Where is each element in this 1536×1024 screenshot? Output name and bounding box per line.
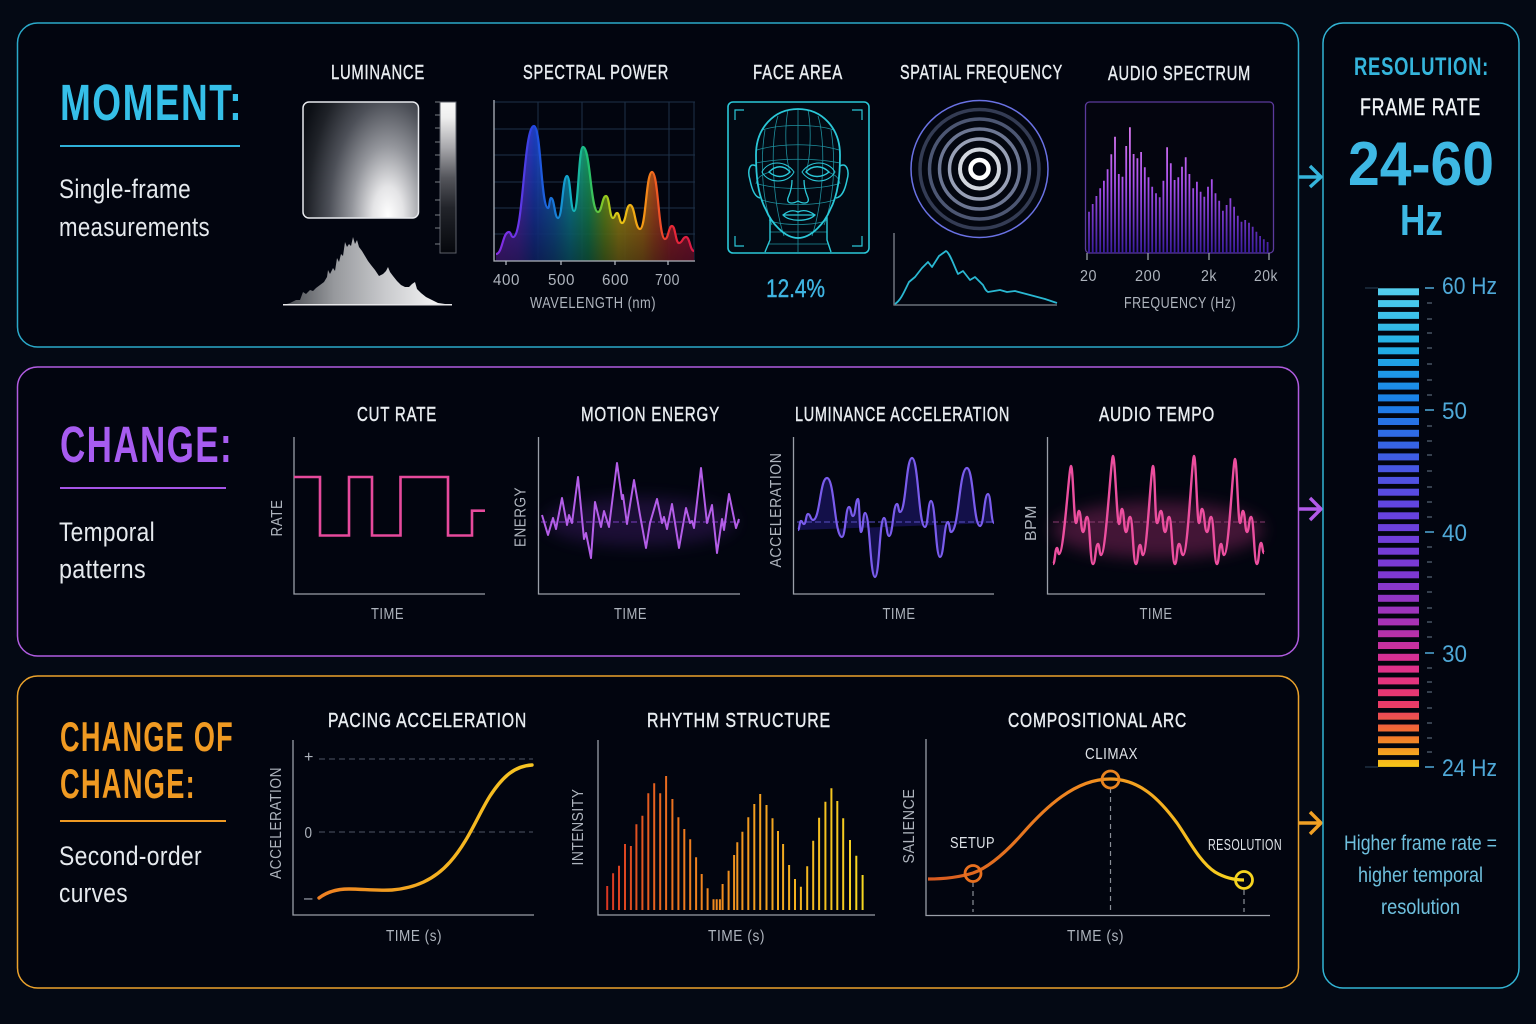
chart: spectral power: WAVELENGTH (nm) <box>530 295 656 312</box>
chart: frame rate scale: 30 <box>1442 641 1467 668</box>
heading: change of change: CHANGE OF <box>60 713 234 760</box>
chart: frame rate scale: 50 <box>1442 398 1467 425</box>
chart: pacing acceleration <box>268 710 534 945</box>
chart: luminance <box>283 62 456 306</box>
chart: audio spectrum: 200 <box>1135 268 1161 285</box>
note: temporal resolution <box>1344 832 1497 919</box>
marker: resolution <box>1236 872 1252 888</box>
chart: frame rate scale: 60 Hz <box>1442 273 1497 300</box>
chart: rhythm structure: INTENSITY <box>570 788 587 866</box>
value: 24-60 Hz: 24-60 <box>1348 130 1494 199</box>
description: change of change <box>59 820 226 908</box>
chart: cut rate: RATE <box>269 500 286 536</box>
panel: moment <box>18 23 1298 347</box>
icon: face mesh <box>735 109 862 252</box>
chart: luminance acceleration <box>768 404 1010 623</box>
value: face area: 12.4% <box>766 275 825 303</box>
chart: frame rate scale: 24 Hz <box>1442 755 1497 782</box>
chart: audio spectrum <box>1080 63 1278 312</box>
description: moment: measurements <box>59 212 210 242</box>
note: temporal resolution: higher temporal <box>1358 864 1483 887</box>
description: moment: Single-frame <box>59 174 191 204</box>
arrow: moment to resolution <box>1299 166 1321 187</box>
chart: spectral power: 500 <box>548 272 575 289</box>
marker: setup <box>965 866 981 882</box>
chart: luminance: LUMINANCE <box>331 62 425 84</box>
chart: rhythm structure <box>570 710 875 945</box>
chart: audio spectrum: FREQUENCY (Hz) <box>1124 295 1236 312</box>
chart: pacing acceleration: + <box>304 749 314 766</box>
arrow: change to resolution <box>1299 498 1321 520</box>
chart: spectral power: 400 <box>493 272 520 289</box>
heading: resolution: RESOLUTION: <box>1354 53 1489 81</box>
chart: luminance acceleration: ACCELERATION <box>768 452 785 568</box>
description: change of change: curves <box>59 878 128 908</box>
icon: concentric rings <box>911 100 1048 238</box>
chart: pacing acceleration: ACCELERATION <box>268 767 285 879</box>
description: change: Temporal <box>59 517 155 547</box>
description: change of change: Second-order <box>59 841 202 871</box>
chart: compositional arc <box>901 710 1282 945</box>
note: temporal resolution: resolution <box>1381 896 1460 919</box>
value: 24-60 Hz: Hz <box>1400 196 1443 245</box>
chart: face area: FACE AREA <box>753 62 843 84</box>
chart: pacing acceleration: 0 <box>304 825 312 842</box>
description: change <box>59 487 226 584</box>
chart: frame rate scale <box>1365 273 1497 782</box>
chart: audio spectrum: AUDIO SPECTRUM <box>1108 63 1251 85</box>
description: moment <box>59 145 240 242</box>
arrow: change of change to resolution <box>1299 812 1321 834</box>
chart: motion energy: TIME <box>614 606 647 623</box>
chart: audio spectrum: 20 <box>1080 268 1097 285</box>
subheading: frame rate: FRAME RATE <box>1360 94 1481 121</box>
chart: motion energy: ENERGY <box>512 487 530 547</box>
chart: cut rate <box>269 404 485 623</box>
chart: motion energy <box>512 404 740 623</box>
chart: spectral power <box>493 62 695 312</box>
description: change: patterns <box>59 554 146 584</box>
chart: audio spectrum: 2k <box>1201 268 1217 285</box>
heading: moment: MOMENT: <box>60 74 243 131</box>
chart: compositional arc: CLIMAX <box>1085 746 1138 763</box>
chart: compositional arc: TIME (s) <box>1067 928 1124 945</box>
chart: face area <box>728 62 869 303</box>
chart: pacing acceleration: – <box>304 890 313 907</box>
chart: compositional arc: COMPOSITIONAL ARC <box>1008 710 1187 732</box>
chart: audio spectrum: 20k <box>1254 268 1278 285</box>
panel: change <box>18 367 1298 656</box>
chart: rhythm structure: RHYTHM STRUCTURE <box>647 710 831 732</box>
chart: audio tempo: AUDIO TEMPO <box>1099 404 1215 426</box>
chart: luminance acceleration: TIME <box>882 606 916 623</box>
chart: rhythm structure: TIME (s) <box>708 928 765 945</box>
chart: audio tempo: BPM <box>1023 505 1040 541</box>
chart: spectral power: 700 <box>655 272 680 289</box>
chart: pacing acceleration: PACING ACCELERATION <box>328 710 527 732</box>
chart: cut rate: TIME <box>371 606 404 623</box>
chart: compositional arc: SALIENCE <box>901 788 918 864</box>
panel: resolution <box>1323 23 1519 988</box>
chart: motion energy: MOTION ENERGY <box>581 404 720 426</box>
chart: cut rate: CUT RATE <box>357 404 437 426</box>
heading: change of change: CHANGE: <box>60 760 196 807</box>
chart: spectral power: SPECTRAL POWER <box>523 62 669 84</box>
chart: compositional arc: SETUP <box>950 835 995 852</box>
chart: audio tempo: TIME <box>1140 606 1172 623</box>
chart: spatial frequency: SPATIAL FREQUENCY <box>900 62 1063 84</box>
panel: change of change <box>18 676 1298 988</box>
marker: climax <box>1102 771 1119 788</box>
heading: change of change <box>60 713 234 807</box>
chart: compositional arc: RESOLUTION <box>1208 837 1282 854</box>
note: temporal resolution: Higher frame rate = <box>1344 832 1497 855</box>
chart: frame rate scale: 40 <box>1442 520 1467 547</box>
chart: audio tempo <box>1023 404 1265 623</box>
chart: spatial frequency <box>894 62 1063 305</box>
chart: spectral power: 600 <box>602 272 629 289</box>
chart: luminance acceleration: LUMINANCE ACCELERATION <box>795 404 1010 426</box>
value: 24-60 Hz <box>1348 130 1494 245</box>
heading: change: CHANGE: <box>60 416 233 473</box>
chart: pacing acceleration: TIME (s) <box>386 928 442 945</box>
